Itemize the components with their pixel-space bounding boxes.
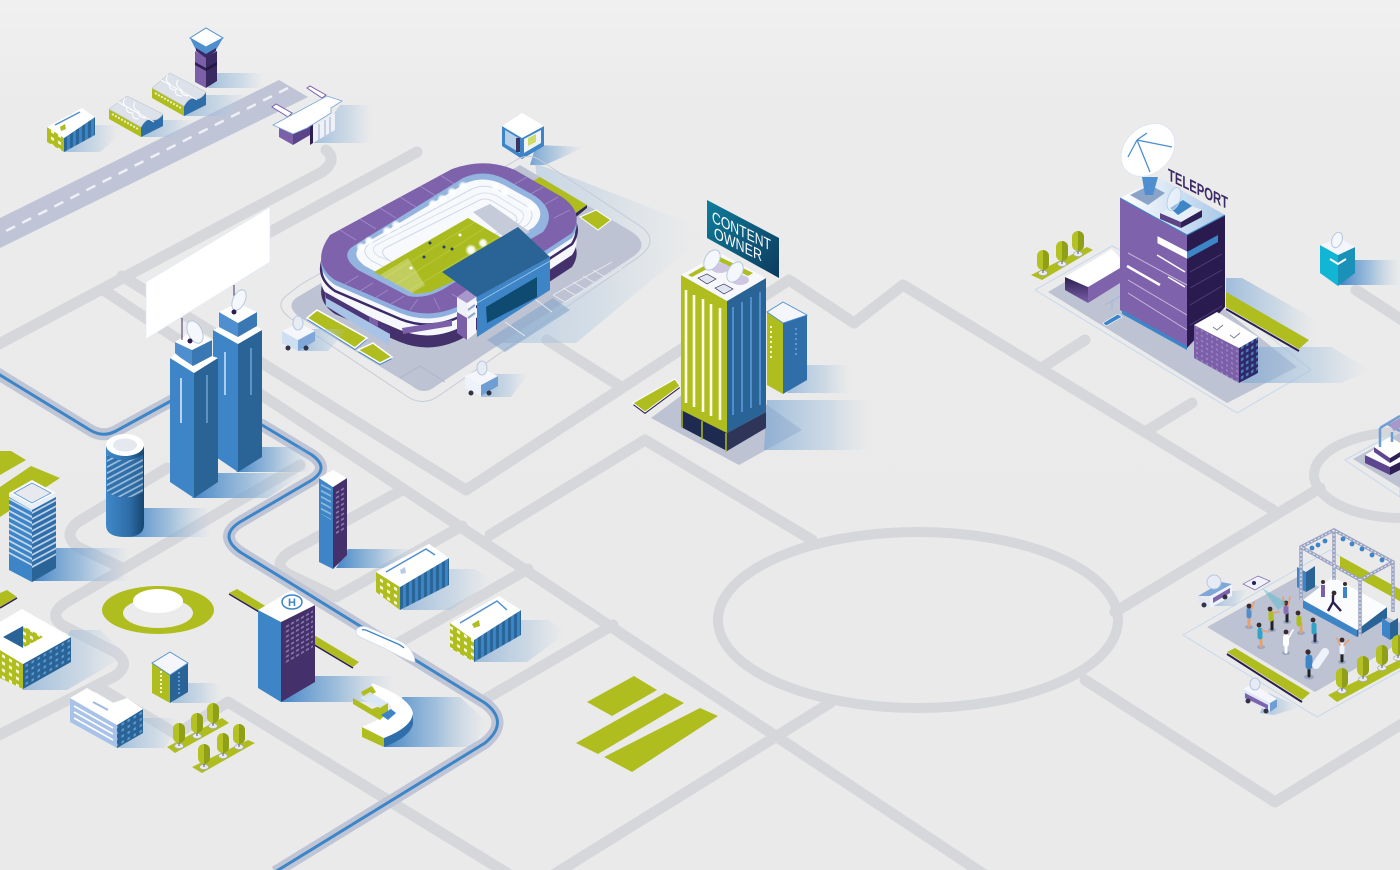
small airport building bbox=[47, 108, 120, 152]
speakers bbox=[1297, 566, 1398, 640]
truss bbox=[1301, 530, 1393, 636]
content owner sign: CONTENT bbox=[712, 208, 771, 255]
booth bbox=[502, 113, 585, 165]
camera operator bbox=[1304, 649, 1325, 680]
dancer 7 bbox=[1282, 630, 1293, 655]
cylinder tower bbox=[106, 434, 144, 537]
helipad tower bbox=[258, 590, 395, 702]
office block B bbox=[450, 596, 567, 662]
back block of content owner bbox=[767, 302, 807, 394]
rooftop equipment bbox=[698, 247, 749, 294]
white and blue building bbox=[70, 688, 180, 748]
stadium facade bbox=[321, 168, 577, 347]
twin towers shadows bbox=[33, 447, 312, 581]
dancer 4 bbox=[1283, 597, 1291, 624]
concert van north bbox=[1198, 575, 1250, 608]
helipad mark: H bbox=[288, 597, 296, 609]
stands bbox=[347, 173, 549, 297]
dancer 3 bbox=[1268, 607, 1279, 632]
teleport front block bbox=[1194, 312, 1258, 383]
floodlights bbox=[356, 181, 536, 256]
concert plot bbox=[1183, 550, 1400, 717]
broadcast van south of stadium bbox=[465, 361, 529, 397]
thin tower bbox=[319, 470, 415, 569]
content owner plot and shadows bbox=[633, 365, 871, 465]
concert trees bbox=[1328, 635, 1400, 702]
teleport sign: TELEPORT bbox=[1168, 165, 1228, 213]
panel: stadium plot bbox=[281, 156, 650, 402]
teleport tower bbox=[1120, 178, 1225, 350]
green plots bbox=[0, 451, 718, 772]
runway bbox=[0, 80, 308, 248]
office block A bbox=[376, 544, 493, 610]
dish bbox=[182, 318, 206, 346]
dish bbox=[229, 285, 249, 314]
stage east bbox=[1345, 416, 1400, 497]
concert stage bbox=[1297, 530, 1400, 640]
small planter at west edge bbox=[0, 590, 17, 608]
content owner sign: OWNER bbox=[714, 224, 762, 265]
stadium roof bbox=[321, 163, 577, 313]
stadium shadow bbox=[446, 163, 700, 343]
dancer 1 bbox=[1245, 602, 1254, 629]
teleport dish bbox=[1110, 113, 1186, 205]
concert van south bbox=[1243, 678, 1300, 715]
teleport trees bbox=[1031, 231, 1093, 280]
cyan building bbox=[1320, 231, 1400, 286]
performers bbox=[1321, 580, 1347, 611]
dancer 6 bbox=[1311, 618, 1319, 644]
dancer 8 bbox=[1337, 638, 1349, 664]
green strip at teleport bbox=[1226, 292, 1309, 351]
stage lights bbox=[1310, 537, 1384, 562]
curved building bbox=[353, 683, 487, 747]
green strip at concert bbox=[1227, 648, 1310, 702]
content owner sign bbox=[707, 200, 779, 278]
teleport plot bbox=[1035, 246, 1371, 413]
small green block bbox=[152, 652, 222, 703]
roof ribs bbox=[340, 175, 570, 310]
content owner tower bbox=[681, 247, 766, 452]
courtyard building bbox=[0, 609, 127, 690]
train bbox=[356, 626, 415, 662]
drone and light cone bbox=[1243, 576, 1287, 610]
tree patch west bbox=[167, 703, 255, 773]
twin tower left bbox=[170, 318, 218, 498]
small dock in teleport plot bbox=[1103, 314, 1122, 326]
planters by stadium bbox=[307, 177, 611, 365]
pitch bbox=[374, 204, 530, 294]
dancer 5 bbox=[1296, 611, 1305, 635]
striped left tower bbox=[9, 480, 56, 582]
billboard bbox=[146, 207, 270, 339]
dancer 2 bbox=[1257, 623, 1268, 649]
hangars bbox=[109, 73, 250, 137]
rail line bbox=[0, 372, 498, 870]
broadcast hall bbox=[442, 227, 550, 340]
twin tower right bbox=[213, 285, 262, 472]
rooftop box and dish bbox=[1160, 186, 1202, 228]
terminal bbox=[272, 86, 373, 145]
stadium bbox=[321, 163, 577, 347]
broadcast van near stadium bbox=[282, 316, 348, 351]
crowd bbox=[1245, 597, 1349, 680]
control tower bbox=[190, 28, 265, 88]
teleport annex bbox=[1065, 249, 1120, 303]
green strip behind helipad tower bbox=[229, 589, 359, 668]
green ring plaza bbox=[102, 586, 214, 634]
